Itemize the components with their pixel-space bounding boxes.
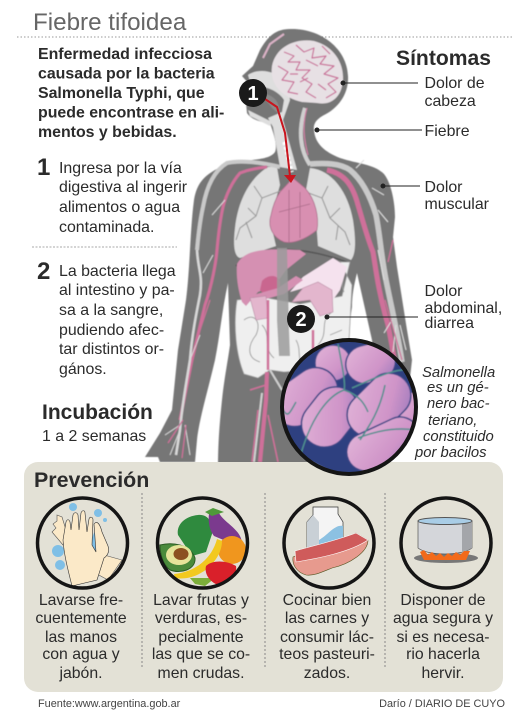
prevention text 2: pecialmente [158,629,244,646]
diaphragm [236,250,347,266]
liver [237,249,306,306]
step 2: 2 [37,258,50,285]
prevention text 3: zados. [304,665,350,682]
intro text: Enfermedad infecciosa [38,46,212,63]
symptom labels [424,75,502,332]
step 1: alimentos o agua [59,199,180,216]
prevention text 2 [152,592,250,682]
step 1: digestiva al ingerir [59,179,188,196]
author credit: Darío / DIARIO DE CUYO [379,698,505,710]
prevention text 1: cuentemente [35,610,127,627]
leader lines [315,81,422,319]
badge 1: 1 [247,83,259,105]
source footer: Fuente:www.argentina.gob.ar [38,698,181,710]
bacteria caption: es un gé- [427,380,489,396]
prevention text 2: las que se co- [152,646,250,663]
step 2: pudiendo afec- [59,322,164,339]
leg vessels [260,372,267,462]
prevention text 1: con agua y [42,646,120,663]
bacteria caption: por bacilos [414,445,487,461]
intro text: puede encontrase en ali- [38,104,224,122]
badge 2: 2 [295,309,307,331]
arm vessels left [197,162,280,250]
symptom labels: Dolor [424,283,463,300]
icon: fruit and vegetables [158,498,248,588]
intro text [38,46,224,141]
prevention text 1: Lavarse fre- [39,592,123,609]
bacteria caption: constituido [423,429,494,445]
step 1: Ingresa por la vía [59,160,182,177]
step 2 [37,258,176,378]
step 2: al intestino y pa- [59,282,175,299]
symptoms heading: Síntomas [396,47,491,70]
step 2: sa a la sangre, [59,302,163,319]
prevention text 4 [393,592,493,682]
prevention heading: Prevención [34,468,149,492]
symptom labels: abdominal, [424,300,502,317]
incubation: 1 a 2 semanas [42,428,146,445]
step 1: 1 [37,154,50,181]
step 1 [37,154,188,236]
step 2: La bacteria llega [59,263,176,280]
pancreas and pink loops [292,282,333,316]
title: Fiebre tifoidea [33,9,187,36]
prevention text 2: men crudas. [158,665,244,682]
spleen and ducts [260,276,280,294]
icon: boiling pot [401,498,491,588]
prevention panel background [24,462,503,692]
heart [270,178,318,242]
bacteria caption: nero bac- [427,396,490,412]
symptom labels: diarrea [424,315,474,332]
symptom labels: Fiebre [424,123,470,140]
symptom labels: cabeza [424,93,476,110]
badge 2 [287,305,315,333]
prevention text 3 [279,592,375,682]
forehead band [263,34,284,58]
bacteria caption: teriano, [428,413,477,429]
bacteria magnified circle [280,338,418,476]
icon: meat and milk [284,498,374,588]
intro text: Salmonella Typhi, que [38,85,205,102]
prevention text 1 [35,592,127,682]
prevention text 3: Cocinar bien [283,592,371,609]
throat and oral cavity [248,71,297,170]
bacteria caption [414,365,495,461]
incubation: Incubación [42,401,153,424]
symptom labels: Dolor [424,179,463,196]
incubation [42,401,153,445]
brain [272,40,343,104]
prevention text 2: verduras, es- [155,610,247,627]
intro text: mentos y bebidas. [38,124,177,141]
prevention text 4: Disponer de [400,592,486,609]
body silhouette [145,29,412,470]
symptom labels: Dolor de [424,75,485,92]
intestines [235,262,352,378]
symptom labels: muscular [424,196,490,213]
prevention text 4: hervir. [421,665,465,682]
prevention text 4: si es necesa- [396,629,490,646]
step 2: gános. [59,361,107,378]
prevention text 4: agua segura y [393,610,493,627]
icon: washing hands [38,498,128,588]
neck vessels [301,108,310,165]
step 2: tar distintos or- [59,341,164,358]
bacteria caption: Salmonella [422,365,495,381]
stomach [290,258,347,304]
prevention text 3: teos pasteuri- [279,646,375,663]
lungs [234,167,280,258]
prevention text 3: las carnes y [285,610,369,627]
prevention text 1: las manos [45,629,117,646]
bronchi [236,186,350,245]
abdominal aorta [277,248,290,356]
red pathway arrow [265,99,296,183]
arm vessels right [327,170,396,372]
intro text: causada por la bacteria [38,66,215,82]
step 1: contaminada. [59,219,154,236]
prevention text 1: jabón. [58,665,103,682]
human body illustration [145,29,412,470]
prevention text 4: rio hacerla [406,646,480,663]
prevention text 3: consumir lác- [280,629,374,646]
badge 1 [239,79,267,107]
prevention text 2: Lavar frutas y [153,592,249,609]
tongue [258,94,280,115]
